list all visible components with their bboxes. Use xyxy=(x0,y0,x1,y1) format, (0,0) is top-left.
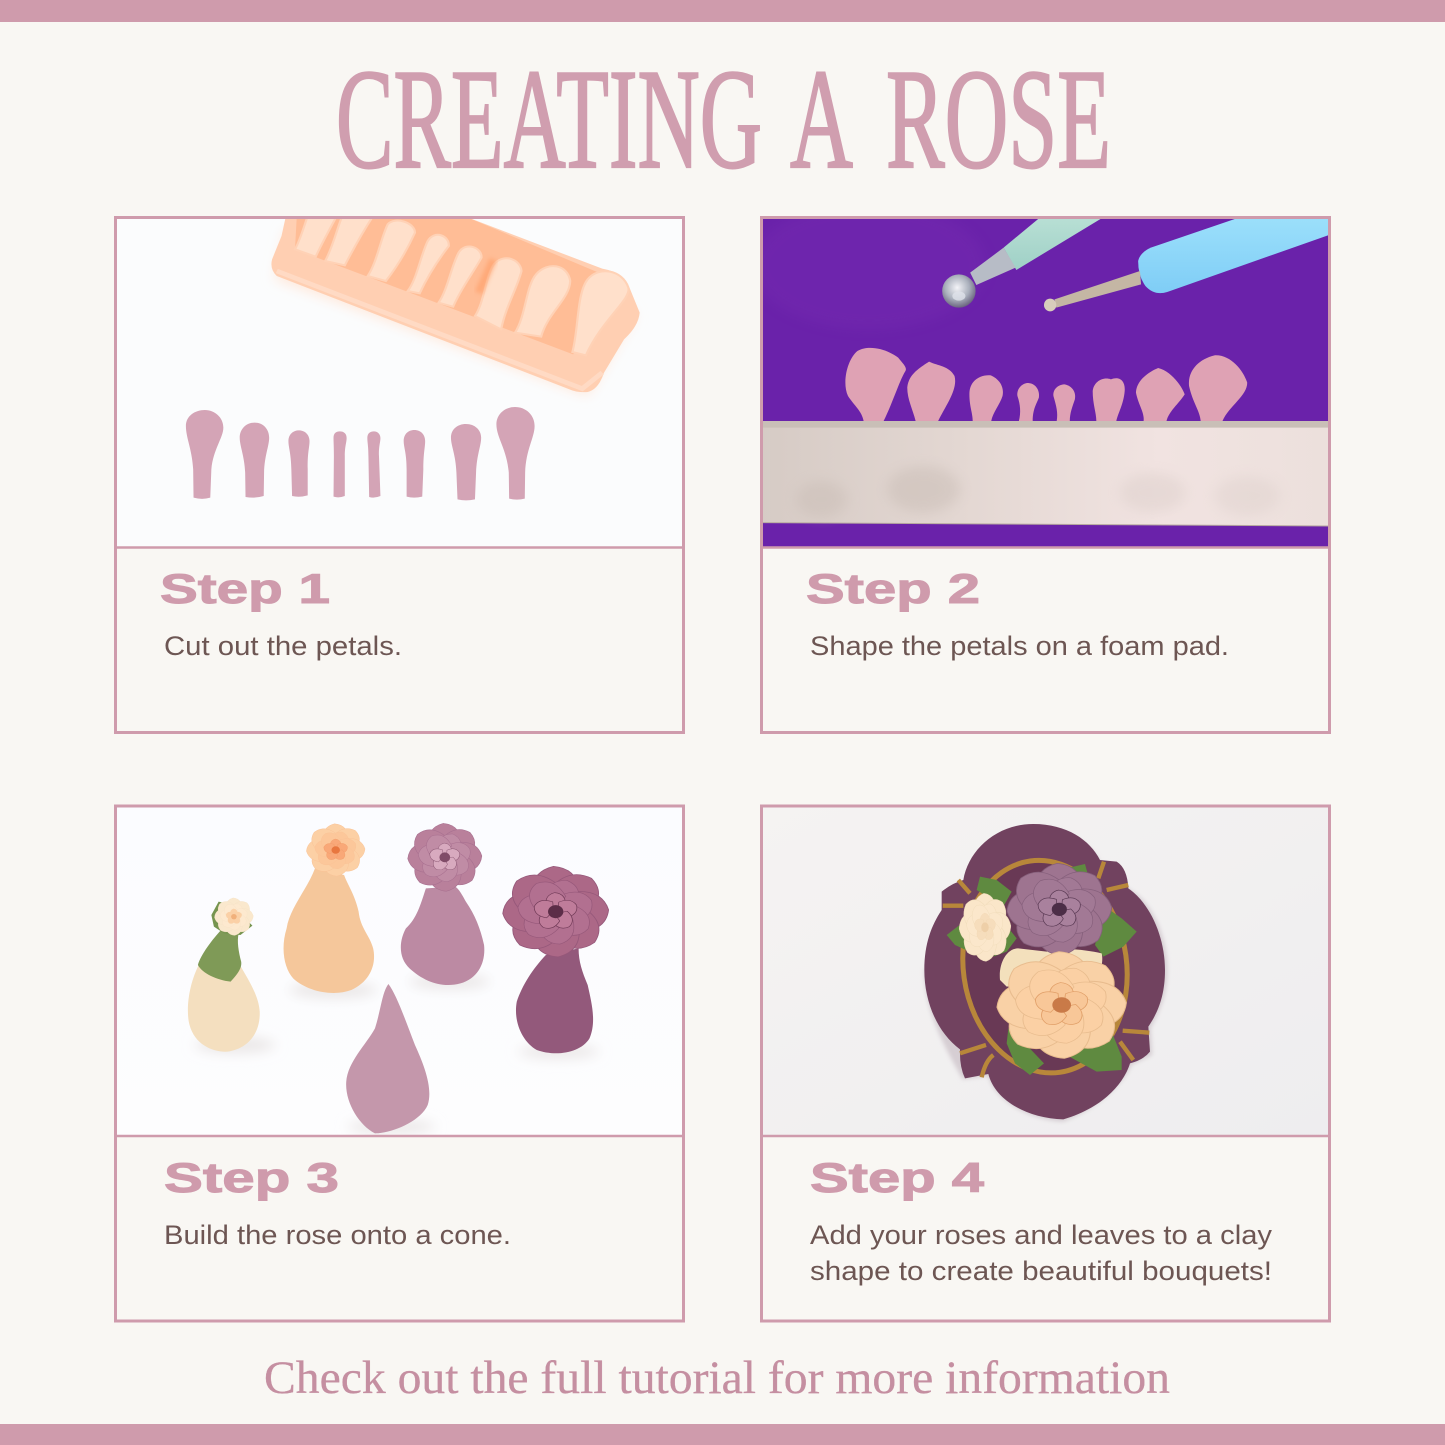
divider and frame xyxy=(116,806,684,1321)
photo: petal cutter and cut petals xyxy=(116,216,683,547)
cone: dark plum with open rose xyxy=(501,865,610,1053)
text: step 2 body: Shape the petals on a foam pad. xyxy=(810,631,1229,661)
text: step 1 body: Cut out the petals. xyxy=(164,631,402,661)
cone: peach with orange rose xyxy=(284,823,374,993)
text: step 4 body: shape to create beautiful bouquets! xyxy=(810,1256,1272,1286)
cone: cream with green bud xyxy=(188,897,260,1052)
text: step 4 body: Add your roses and leaves to a clay xyxy=(810,1220,1273,1250)
title: A xyxy=(790,40,853,198)
divider and frame xyxy=(762,218,1330,732)
icon: mint ball tool xyxy=(942,216,1105,308)
cream rose xyxy=(958,892,1012,962)
panel: step 4 xyxy=(761,806,1330,1321)
text: step 4 body xyxy=(810,1220,1273,1286)
cone: plain pink cone xyxy=(346,984,429,1133)
photo: roses built on clay cones xyxy=(116,807,683,1136)
shaped petals xyxy=(845,348,1247,421)
gold oval xyxy=(960,858,1130,1076)
cutter glow xyxy=(275,229,635,396)
footer call to action: Check out the full tutorial for more information xyxy=(264,1352,1170,1404)
heading: step 1: Step 1 xyxy=(160,565,330,612)
title: ROSE xyxy=(886,40,1111,198)
cut petals row xyxy=(186,407,535,500)
icon: peach petal cutter xyxy=(271,216,640,392)
divider and frame xyxy=(116,218,684,732)
text: step 3 body: Build the rose onto a cone. xyxy=(164,1220,511,1250)
plaque body xyxy=(924,824,1165,1119)
heading: step 4: Step 4 xyxy=(810,1154,985,1201)
title: CREATING xyxy=(336,40,762,198)
icon: blue ball tool xyxy=(1044,216,1331,311)
panel: step 2 xyxy=(753,203,1331,732)
green leaves xyxy=(947,864,1137,1075)
panel: step 1 xyxy=(115,216,684,732)
photo: shaped petals on foam pad xyxy=(753,203,1331,547)
foam shading xyxy=(753,203,985,329)
bottom band xyxy=(0,1424,1445,1445)
divider and frame xyxy=(762,806,1330,1321)
metal ruler xyxy=(760,421,1331,526)
heading: step 2: Step 2 xyxy=(806,565,980,612)
mauve rose xyxy=(1005,862,1113,957)
peach rose xyxy=(995,950,1128,1060)
inner plate xyxy=(966,864,1124,1070)
gold corner ticks xyxy=(943,862,1149,1077)
heading: step 3: Step 3 xyxy=(164,1154,339,1201)
cone: mauve with pink rose xyxy=(401,822,484,985)
top band xyxy=(0,0,1445,22)
photo: finished clay rose bouquet plaque xyxy=(852,824,1328,1134)
cone shadows xyxy=(195,974,599,1134)
pale back petals xyxy=(1000,948,1102,987)
panel: step 3 xyxy=(115,806,684,1321)
plaque shadow xyxy=(924,827,1167,1122)
